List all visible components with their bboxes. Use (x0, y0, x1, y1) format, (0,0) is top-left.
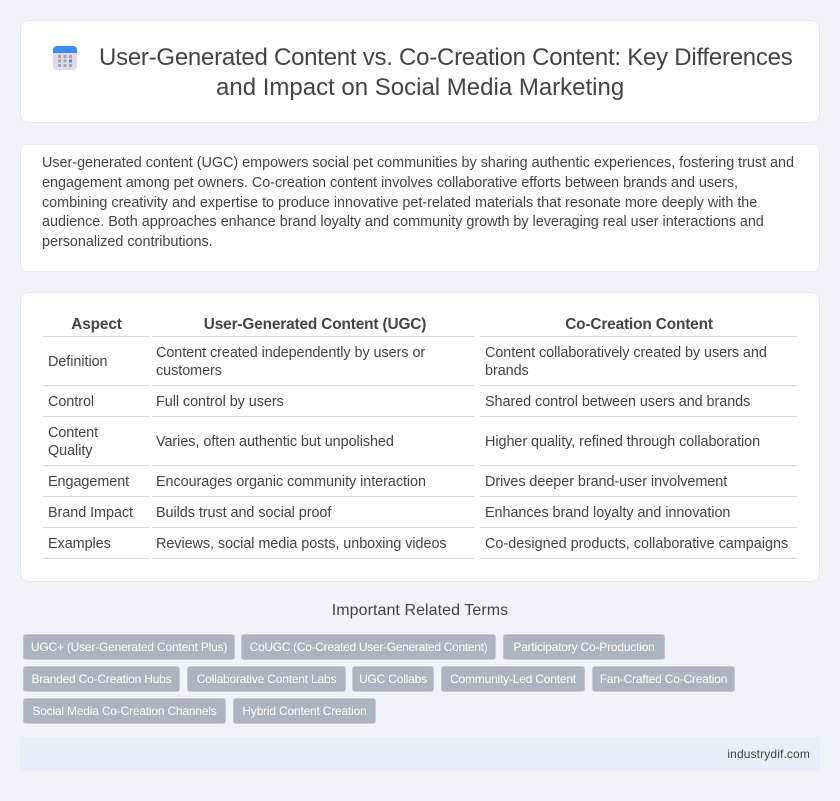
comparison table: Encourages organic community interaction (156, 474, 426, 490)
footer source: industrydif.com (727, 747, 810, 761)
intro text: User-generated content (UGC) empowers social pet communities by sharing authentic experiences, fostering trust and (42, 155, 794, 171)
related terms tags: Branded Co-Creation Hubs (32, 672, 171, 686)
intro card (20, 144, 820, 272)
comparison table: Full control by users (156, 394, 284, 410)
comparison table: Reviews, social media posts, unboxing videos (156, 536, 447, 552)
comparison table: User-Generated Content (UGC) (204, 316, 426, 333)
title card (20, 20, 820, 123)
comparison table: customers (156, 363, 222, 379)
comparison table: Varies, often authentic but unpolished (156, 434, 394, 450)
comparison table: Engagement (48, 474, 129, 490)
comparison table: Higher quality, refined through collaboration (485, 434, 760, 450)
intro text: personalized contributions. (42, 234, 213, 250)
comparison table: Brand Impact (48, 505, 133, 521)
footer bar (20, 737, 820, 771)
related terms tags (23, 634, 735, 724)
comparison table: brands (485, 363, 529, 379)
comparison table: Content (48, 425, 98, 441)
related terms tags: Community-Led Content (450, 672, 576, 686)
related terms tags: Fan-Crafted Co-Creation (600, 672, 727, 686)
comparison table (43, 316, 797, 559)
related terms tags: CoUGC (Co-Created User-Generated Content) (250, 640, 487, 654)
comparison table: Co-Creation Content (565, 316, 713, 333)
related terms tags: UGC Collabs (359, 672, 427, 686)
comparison table: Control (48, 394, 94, 410)
intro text: audience. Both approaches enhance brand loyalty and community growth by leveraging real user interactions and (42, 214, 764, 230)
table header: Aspect (71, 316, 122, 333)
related terms tags: Participatory Co-Production (513, 640, 655, 654)
related terms heading: Important Related Terms (332, 602, 508, 619)
related terms tags: UGC+ (User-Generated Content Plus) (31, 640, 227, 654)
text: and Impact on Social Media Marketing (216, 74, 624, 101)
title (99, 44, 792, 101)
comparison table: Drives deeper brand-user involvement (485, 474, 727, 490)
intro text (42, 155, 794, 250)
comparison table: Enhances brand loyalty and innovation (485, 505, 730, 521)
intro text: combining creativity and expertise to produce innovative pet-related materials that resonate more deeply with the (42, 195, 757, 211)
related terms tags: Social Media Co-Creation Channels (32, 704, 217, 718)
comparison table: Content created independently by users or (156, 345, 425, 361)
comparison table: Shared control between users and brands (485, 394, 750, 410)
related terms tags: Collaborative Content Labs (197, 672, 336, 686)
related terms tags: Hybrid Content Creation (242, 704, 367, 718)
comparison table: Definition (48, 354, 108, 370)
text: User-Generated Content vs. Co-Creation Content: Key Differences (99, 44, 792, 71)
icon: calendar (53, 46, 77, 70)
comparison table: Quality (48, 443, 92, 459)
comparison table: Builds trust and social proof (156, 505, 331, 521)
table card (20, 292, 820, 582)
comparison table: Content collaboratively created by users and (485, 345, 767, 361)
comparison table: Co-designed products, collaborative campaigns (485, 536, 788, 552)
intro text: engagement among pet owners. Co-creation content involves collaborative efforts between brands and users, (42, 175, 738, 191)
comparison table: Examples (48, 536, 111, 552)
